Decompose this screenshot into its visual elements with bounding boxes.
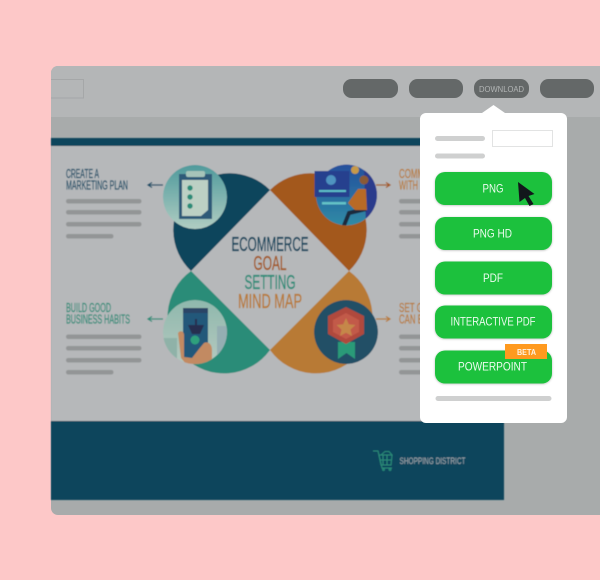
beta badge <box>505 344 547 359</box>
icon: person at monitor <box>314 164 378 228</box>
block: create a marketing plan: MARKETING PLAN <box>66 178 128 192</box>
icon: medal badge <box>314 300 378 364</box>
download button <box>474 79 529 98</box>
button: PNG HD <box>435 217 552 250</box>
footer brand: SHOPPING DISTRICT <box>400 456 466 467</box>
button: interactive PDF <box>435 306 552 338</box>
label placeholder 1 <box>435 136 485 141</box>
central title <box>232 234 308 313</box>
icon: clipboard <box>163 165 227 229</box>
block: build good business habits: BUSINESS HABITS <box>66 312 130 326</box>
central title: MIND MAP <box>238 291 302 313</box>
button: PNG: PNG <box>482 184 504 196</box>
poster footer <box>51 421 504 500</box>
beta badge: BETA <box>517 347 536 357</box>
block: build good business habits <box>66 301 142 374</box>
download button: DOWNLOAD <box>479 84 524 94</box>
icon: phone in hand <box>163 300 229 364</box>
poster top band <box>51 138 504 146</box>
block: create a marketing plan <box>66 167 142 238</box>
button: interactive PDF: INTERACTIVE PDF <box>450 316 536 328</box>
block: communicate, partly hidden: WITH <box>399 178 418 192</box>
toolbar input box <box>51 80 84 98</box>
arrow: teal <box>148 316 163 322</box>
arrow: navy <box>148 182 163 188</box>
block: build good business habits: BUILD GOOD <box>66 301 111 315</box>
button: PDF: PDF <box>483 273 503 285</box>
icon: mouse cursor <box>518 182 534 206</box>
size input <box>492 130 552 146</box>
arrow: rust <box>376 182 390 188</box>
toolbar <box>51 66 600 117</box>
block: set goals, partly hidden <box>399 301 429 374</box>
button: PowerPoint: POWERPOINT <box>458 362 527 374</box>
petal: teal <box>168 271 270 373</box>
toolbar button 2 <box>409 79 463 98</box>
toolbar button 1 <box>343 79 398 98</box>
block: set goals, partly hidden: SET G <box>399 301 423 315</box>
toolbar button 4 <box>540 79 594 98</box>
label placeholder 2 <box>435 154 485 158</box>
footer placeholder <box>436 396 552 401</box>
infographic canvas <box>50 66 600 515</box>
button: PNG HD: PNG HD <box>473 228 512 240</box>
app window <box>51 66 600 515</box>
block: communicate, partly hidden: COMM <box>399 167 424 181</box>
central title: SETTING <box>244 272 296 294</box>
block: communicate, partly hidden <box>399 167 429 238</box>
central title: GOAL <box>254 253 286 275</box>
icon: shopping cart <box>373 451 392 470</box>
block: set goals, partly hidden: CAN B <box>399 312 423 326</box>
button: PDF <box>435 262 552 294</box>
button: PNG <box>435 172 552 205</box>
block: create a marketing plan: CREATE A <box>66 167 99 181</box>
button: PowerPoint <box>435 350 552 384</box>
petal: navy <box>173 173 270 271</box>
central title: ECOMMERCE <box>232 234 308 256</box>
petal: amber <box>270 271 372 373</box>
petal: rust <box>270 173 367 271</box>
mind map petals <box>168 173 372 373</box>
arrow: amber <box>376 316 390 322</box>
poster preview <box>51 138 504 500</box>
download dropdown panel <box>420 105 567 423</box>
